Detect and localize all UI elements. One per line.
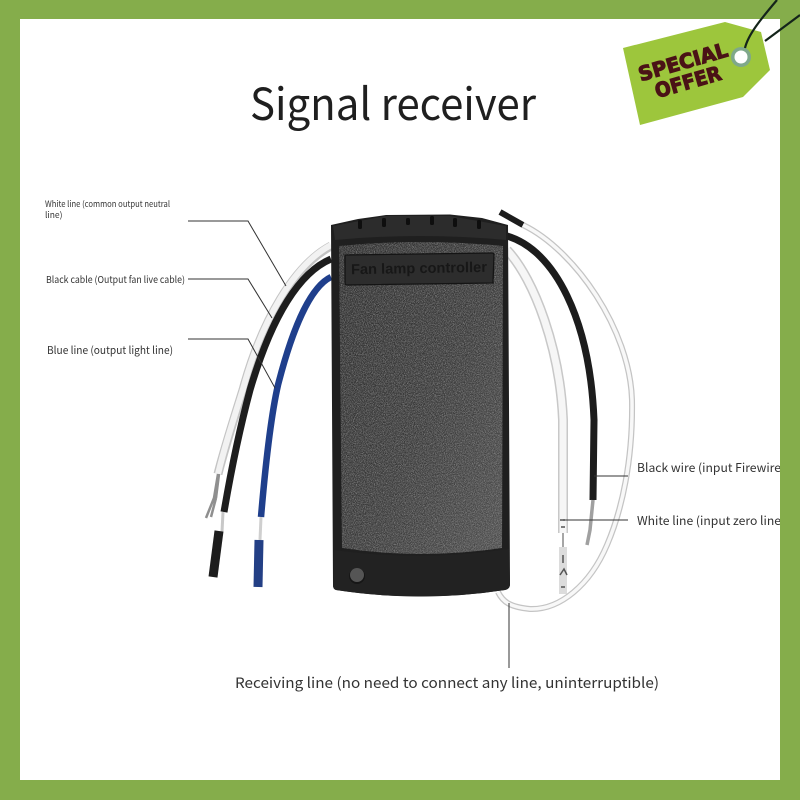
callout: white output line: White line (common output neutral — [45, 198, 171, 210]
long receiving wire — [498, 212, 632, 609]
embossed label text: Fan lamp controller — [351, 260, 487, 278]
wires: right input wires — [498, 212, 632, 609]
tag body — [623, 22, 770, 125]
cooling slots — [358, 216, 481, 229]
white input wire — [507, 250, 567, 594]
recessed label plate — [345, 253, 494, 285]
LED button — [349, 568, 365, 584]
callout: black output cable: Black cable (Output fan live cable) — [46, 272, 185, 286]
badge: special offer tag — [623, 0, 800, 125]
wires: left output wires — [206, 245, 331, 587]
callout: white input line: White line (input zero line — [637, 512, 781, 529]
bottom band — [333, 549, 510, 596]
top band highlight — [333, 216, 506, 240]
black output wire — [213, 259, 331, 577]
callout: black input wire: Black wire (input Firewire — [637, 459, 781, 476]
callout: white output line — [45, 198, 286, 286]
tag strings — [745, 0, 800, 48]
callout: blue output line: Blue line (output light line) — [47, 343, 173, 358]
callout: white output line: line) — [45, 209, 63, 221]
badge: special offer tag: OFFER — [652, 61, 724, 103]
device: signal receiver body — [331, 214, 510, 596]
tag text: SPECIAL — [635, 38, 731, 86]
callout: receiving line: Receiving line (no need to connect any line, uninterruptible) — [235, 672, 659, 693]
callout: black output cable — [46, 272, 272, 318]
blue output wire — [258, 277, 331, 587]
device shell — [331, 214, 510, 596]
white output wire — [206, 245, 331, 518]
textured front panel — [335, 236, 507, 561]
callout: blue output line — [47, 339, 275, 388]
tag eyelet — [731, 47, 751, 67]
black input wire — [507, 236, 594, 545]
title: Signal receiver — [250, 69, 537, 133]
